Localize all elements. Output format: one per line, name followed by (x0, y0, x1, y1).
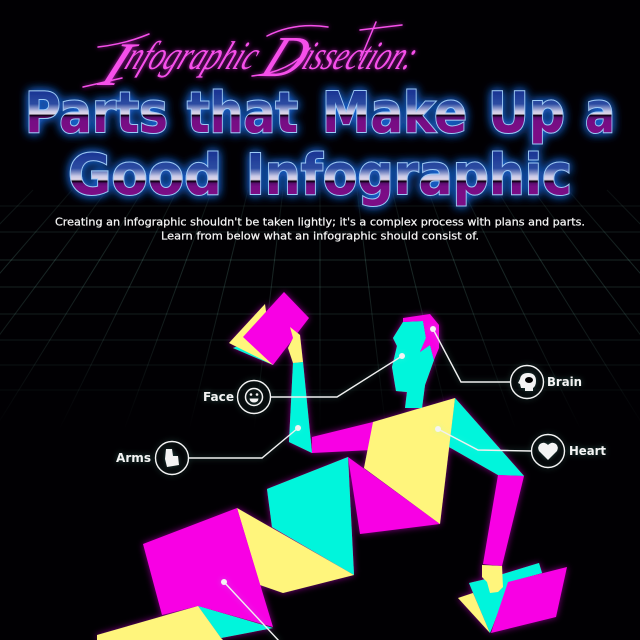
callout: Arms: Arms (116, 451, 151, 465)
subtitle text (55, 216, 585, 242)
script heading: Infographic Dissection: I (90, 31, 147, 99)
lower book (458, 563, 567, 633)
abdomen (237, 457, 354, 593)
icon: heart (538, 443, 558, 460)
callout: Brain: Brain (547, 375, 582, 389)
main title: chrome gradient headline: Good (68, 143, 222, 208)
callout: Face (203, 353, 405, 414)
main title: chrome gradient headline: Parts (25, 81, 168, 146)
subtitle text: Learn from below what an infographic should consist of. (161, 230, 479, 242)
main title: chrome gradient headline: Make (322, 81, 467, 146)
script heading: Infographic Dissection: D (251, 25, 321, 89)
callout: Arms (116, 425, 301, 474)
icon: smiley face (246, 388, 262, 406)
callout: Heart (435, 426, 606, 468)
main title: chrome gradient headline: that (187, 81, 298, 146)
main title: chrome gradient headline: Infographic (246, 143, 572, 208)
callout: Heart: Heart (569, 444, 606, 458)
icon: flexed arm (165, 449, 179, 467)
script heading: Infographic Dissection: nfographic (119, 34, 268, 78)
main title: chrome gradient headline: Up (488, 81, 565, 146)
callout: Face: Face (203, 390, 234, 404)
subtitle text: Creating an infographic shouldn't be taken lightly; it's a complex process with plans and parts. (55, 216, 585, 228)
callout: Brain (430, 326, 582, 398)
lower hand (482, 565, 503, 593)
raised book (229, 292, 309, 365)
script heading: Infographic Dissection (83, 22, 426, 99)
icon: head with brain (518, 373, 536, 391)
torso (348, 398, 455, 534)
main title: chrome gradient headline: a (585, 81, 615, 146)
script heading: Infographic Dissection: issection: (296, 34, 426, 78)
main title: chrome gradient headline (25, 81, 615, 208)
raised arm (288, 327, 373, 453)
right arm and shoulder (449, 398, 524, 566)
geometric human figure (97, 292, 567, 640)
head (392, 314, 439, 408)
hips and leg (97, 508, 273, 640)
callout line from hips (221, 579, 280, 640)
